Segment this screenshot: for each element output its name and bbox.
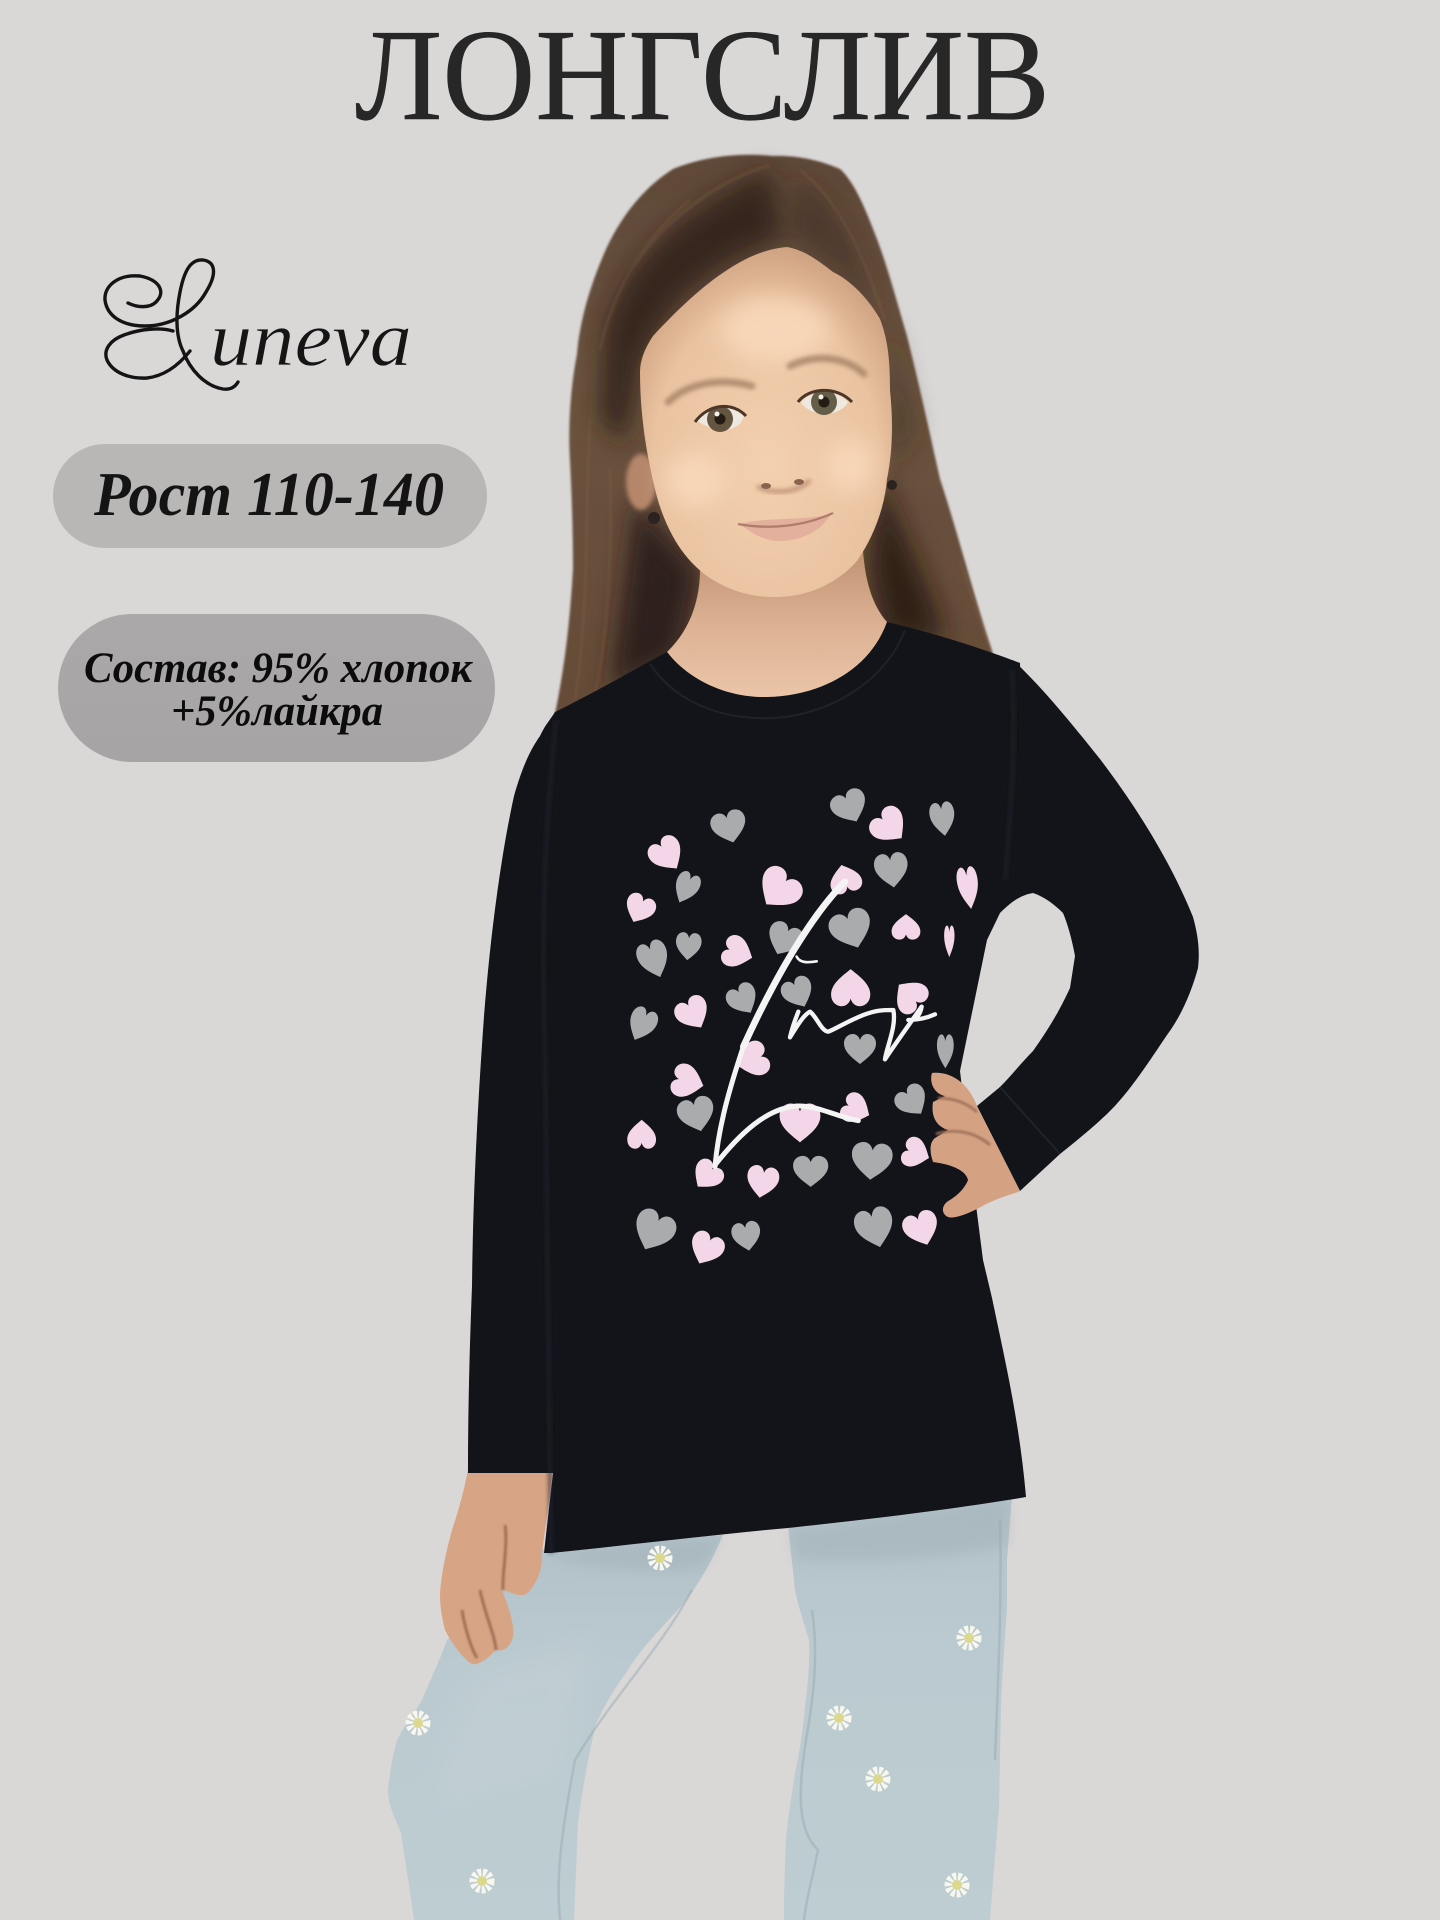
sleeve seams <box>543 670 1014 1553</box>
collar <box>650 630 905 718</box>
logo: Luneva <box>105 260 412 389</box>
left ear <box>626 454 656 510</box>
print: hearts and signature <box>620 785 982 1271</box>
face <box>640 247 892 597</box>
left hand <box>440 1470 553 1664</box>
daisy prints <box>410 1550 977 1893</box>
hair strands <box>575 165 990 700</box>
eyes <box>695 389 852 432</box>
mouth <box>738 513 833 541</box>
title: ЛОНГСЛИВ <box>355 3 1050 148</box>
right sleeve <box>977 660 1199 1191</box>
nose <box>757 479 810 491</box>
pill: composition <box>58 614 495 762</box>
pill: height range <box>53 444 487 548</box>
pill: height range: Рост 110-140 <box>93 461 444 529</box>
logo: Luneva: Luneva <box>204 295 412 382</box>
hair <box>555 155 993 714</box>
eyebrows <box>668 358 864 402</box>
right hand <box>931 1073 1020 1218</box>
pink hearts <box>620 802 982 1271</box>
shirt <box>468 622 1199 1553</box>
cheek highlights <box>665 298 874 508</box>
pill: composition: +5%лайкра <box>171 688 383 735</box>
body and left sleeve <box>468 622 1026 1553</box>
girl figure <box>388 155 1199 1920</box>
earrings <box>648 480 897 524</box>
white signature strokes <box>715 882 935 1167</box>
jeans <box>388 1495 1012 1920</box>
neck <box>667 550 887 697</box>
hair shadows <box>600 170 945 690</box>
silver hearts <box>622 785 957 1258</box>
jeans shading and seams <box>790 1500 1008 1562</box>
pill: composition: Состав: 95% хлопок <box>84 645 473 692</box>
